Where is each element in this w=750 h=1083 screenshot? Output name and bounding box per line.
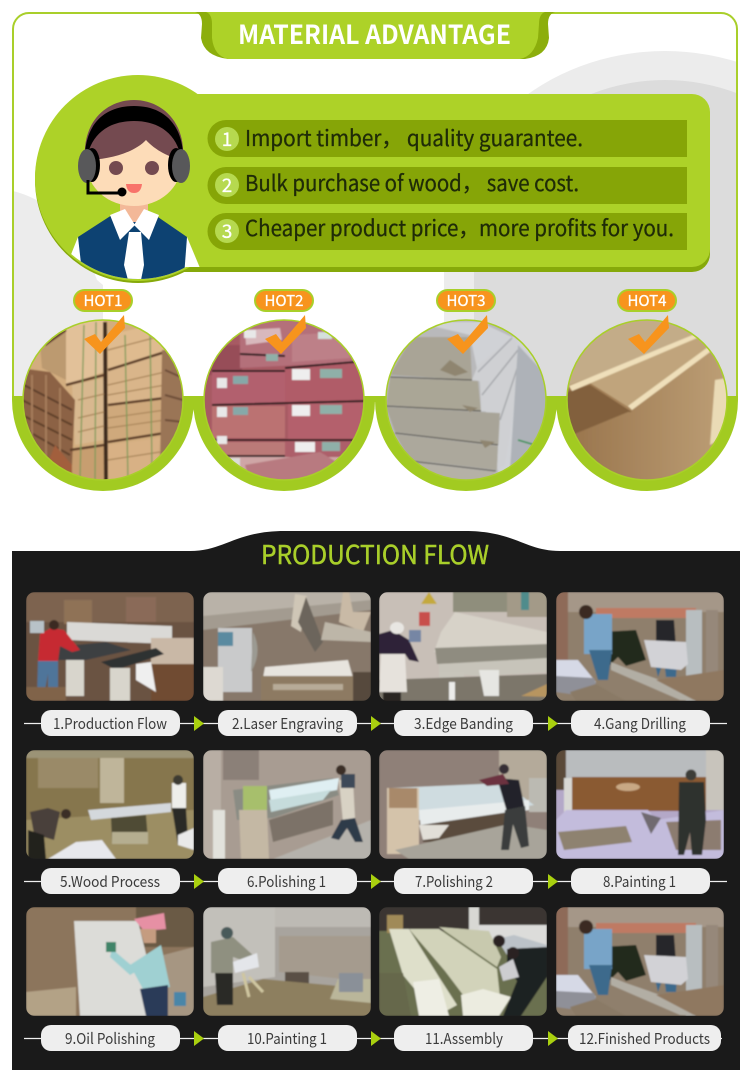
- frame outline: [13, 13, 737, 400]
- label 4: [571, 710, 710, 736]
- photo 9: oil polishing: [26, 907, 194, 1016]
- label 11: [394, 1025, 533, 1051]
- benefit row 2: [208, 166, 687, 204]
- arrows row 3: [194, 1031, 558, 1046]
- photo 7: polishing 2: [379, 750, 547, 859]
- flow row 3: [24, 1025, 722, 1051]
- photo 4: gang drill: [556, 592, 724, 701]
- arrows row 2: [194, 874, 558, 889]
- badge: HOT2: [255, 290, 313, 311]
- icon: check mark 2: [265, 315, 306, 354]
- label 3: 3.Edge Banding: [414, 713, 513, 734]
- photo: MDF boards: [560, 315, 730, 485]
- photo 12: finished products: [556, 907, 724, 1016]
- panel: material advantage: [12, 12, 750, 491]
- label 12: 12.Finished Products: [579, 1028, 710, 1049]
- number badge 3: 3: [222, 217, 232, 244]
- photo 5: wood process: [26, 750, 194, 859]
- photo 10: spray painting: [203, 907, 371, 1016]
- number badge 2: 2: [222, 171, 232, 198]
- connector line 3: [24, 1038, 722, 1040]
- connector line 1: [24, 722, 727, 724]
- number badge 2: [215, 171, 239, 198]
- badge: HOT4: HOT4: [628, 290, 666, 311]
- label 10: 10.Painting 1: [247, 1028, 327, 1049]
- label 6: [218, 868, 357, 894]
- heading: material advantage: MATERIAL ADVANTAGE: [238, 15, 511, 52]
- dark background with hump: [12, 531, 740, 1070]
- photo 1: panel saw: [26, 592, 194, 701]
- label 1: 1.Production Flow: [53, 713, 167, 734]
- label 4: 4.Gang Drilling: [594, 713, 686, 734]
- flow row 2: [24, 868, 727, 894]
- icon: check mark 3: [447, 315, 488, 354]
- benefit row 1: [208, 120, 687, 157]
- photo 2: CNC engraver: [203, 592, 371, 701]
- photo: timber stacks: [20, 315, 190, 485]
- label 8: [571, 868, 710, 894]
- benefit text 3: Cheaper product price，more profits for you.: [245, 211, 674, 243]
- badge: HOT2: HOT2: [265, 290, 303, 311]
- label 7: [394, 868, 533, 894]
- badge: HOT4: [618, 290, 676, 311]
- number badge 3: [215, 217, 239, 244]
- label 11: 11.Assembly: [425, 1028, 503, 1049]
- label 10: [218, 1025, 357, 1051]
- icon: check mark 4: [628, 315, 669, 354]
- label 3: [394, 710, 533, 736]
- badge: HOT3: HOT3: [447, 290, 485, 311]
- badge: HOT1: HOT1: [84, 290, 122, 311]
- arrows row 1: [194, 716, 558, 731]
- label 8: 8.Painting 1: [603, 871, 676, 892]
- number badge 1: 1: [222, 125, 232, 152]
- background grey shapes: [14, 51, 736, 396]
- icon: customer service agent: [66, 100, 200, 290]
- green scalloped band: [12, 396, 738, 491]
- label 6: 6.Polishing 1: [247, 871, 326, 892]
- photo 3: edge bander: [379, 592, 547, 701]
- flow row 1: [24, 710, 727, 736]
- badge: HOT3: [437, 290, 495, 311]
- photo: red boards on pallets: [200, 315, 370, 485]
- panel: production flow: [12, 531, 740, 1070]
- photo 8: painting 1: [556, 750, 724, 859]
- benefit text 1: Import timber， quality guarantee.: [245, 121, 583, 153]
- label 9: 9.Oil Polishing: [65, 1028, 155, 1049]
- heading: production flow: PRODUCTION FLOW: [261, 535, 489, 572]
- badge: HOT1: [74, 290, 132, 311]
- label 7: 7.Polishing 2: [415, 871, 493, 892]
- photo: grey board stack: [385, 319, 547, 480]
- benefit text 2: Bulk purchase of wood， save cost.: [245, 166, 579, 198]
- label 5: 5.Wood Process: [60, 871, 160, 892]
- label 5: [41, 868, 180, 894]
- label 2: 2.Laser Engraving: [232, 713, 343, 734]
- benefit row 3: [208, 211, 687, 250]
- title tab: [195, 12, 555, 59]
- icon: check mark 1: [84, 315, 125, 354]
- photo 11: assembly: [379, 907, 547, 1016]
- number badge 1: [215, 125, 239, 152]
- connector line 2: [24, 880, 727, 882]
- label 9: [41, 1025, 180, 1051]
- green info panel: [35, 75, 710, 283]
- photo 6: polishing 1: [203, 750, 371, 859]
